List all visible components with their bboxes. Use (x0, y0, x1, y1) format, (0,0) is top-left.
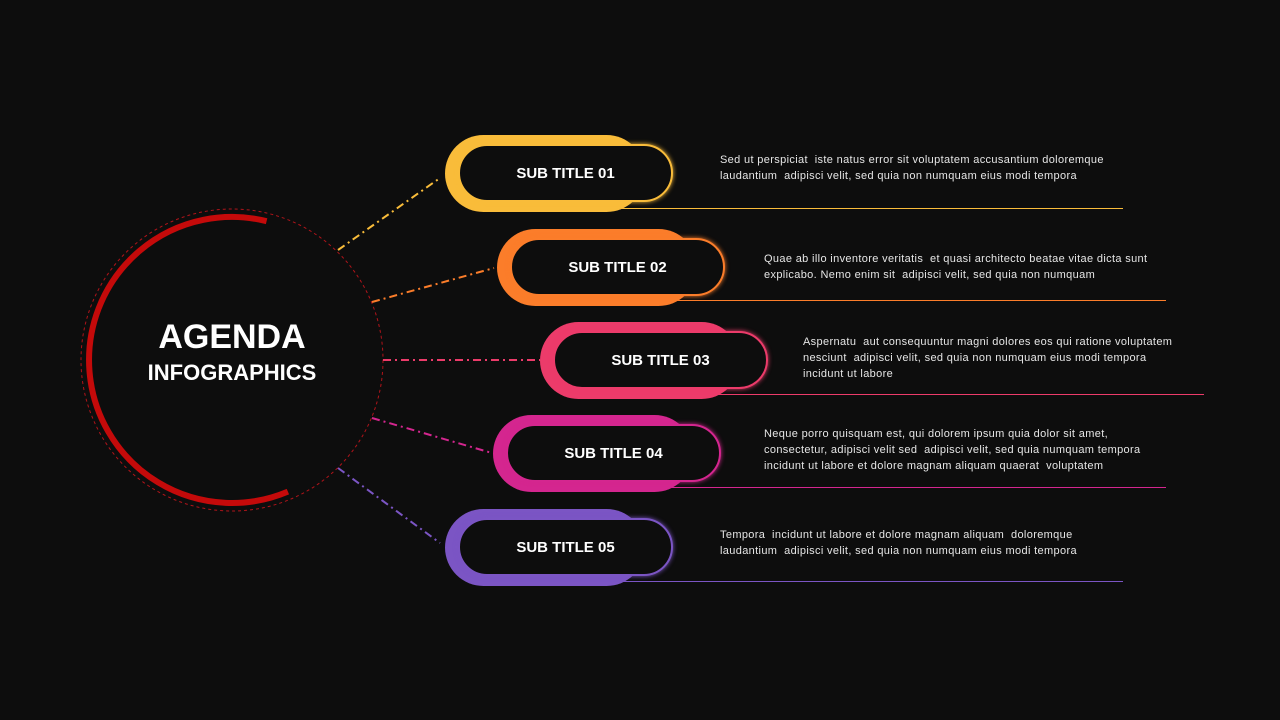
title: AGENDA (158, 318, 306, 356)
pill 5: SUB TITLE 05 (516, 538, 615, 556)
pill 4 (493, 415, 724, 492)
connector 5 (338, 468, 440, 543)
text 3: nesciunt adipisci velit, sed quia non numquam eius modi tempora (803, 352, 1146, 364)
text 1: laudantium adipisci velit, sed quia non numquam eius modi tempora (720, 170, 1077, 182)
text 5: Tempora incidunt ut labore et dolore magnam aliquam doloremque (720, 529, 1073, 541)
connector 4 (372, 418, 492, 453)
text 2: explicabo. Nemo enim sit adipisci velit, sed quia non numquam (764, 269, 1095, 281)
connector 2 (372, 268, 494, 302)
text 4: Neque porro quisquam est, qui dolorem ipsum quia dolor sit amet, (764, 428, 1108, 440)
text 4: consectetur, adipisci velit sed adipisci velit, sed quia numquam tempora (764, 444, 1141, 456)
pill 5 (445, 509, 676, 586)
pill 3 (540, 322, 772, 399)
text 2: Quae ab illo inventore veritatis et quasi architecto beatae vitae dicta sunt (764, 253, 1147, 265)
red arc (89, 217, 288, 503)
title: INFOGRAPHICS (148, 360, 316, 385)
connector 3 (383, 359, 540, 361)
underline 3 (715, 394, 1204, 395)
pill 4: SUB TITLE 04 (564, 444, 663, 462)
pill 3: SUB TITLE 03 (611, 352, 710, 368)
dashed outer circle (81, 209, 383, 511)
underline 5 (620, 581, 1123, 582)
text 3: Aspernatu aut consequuntur magni dolores eos qui ratione voluptatem (803, 336, 1172, 348)
connector 1 (338, 178, 440, 250)
underline 4 (668, 487, 1166, 488)
title (148, 318, 316, 385)
text 4: incidunt ut labore et dolore magnam aliquam quaerat voluptatem (764, 460, 1103, 472)
text 1 (720, 154, 1104, 182)
text 5: laudantium adipisci velit, sed quia non numquam eius modi tempora (720, 545, 1077, 557)
underline 1 (620, 208, 1123, 209)
text 2 (764, 253, 1147, 281)
pill 1: SUB TITLE 01 (516, 164, 615, 182)
pill 2: SUB TITLE 02 (568, 258, 667, 276)
text 4 (764, 428, 1141, 472)
pill 1 (445, 135, 677, 212)
text 3 (803, 336, 1172, 380)
underline 2 (672, 300, 1166, 301)
text 1: Sed ut perspiciat iste natus error sit voluptatem accusantium doloremque (720, 154, 1104, 166)
pill 2 (497, 229, 729, 306)
text 3: incidunt ut labore (803, 368, 893, 380)
text 5 (720, 529, 1077, 557)
